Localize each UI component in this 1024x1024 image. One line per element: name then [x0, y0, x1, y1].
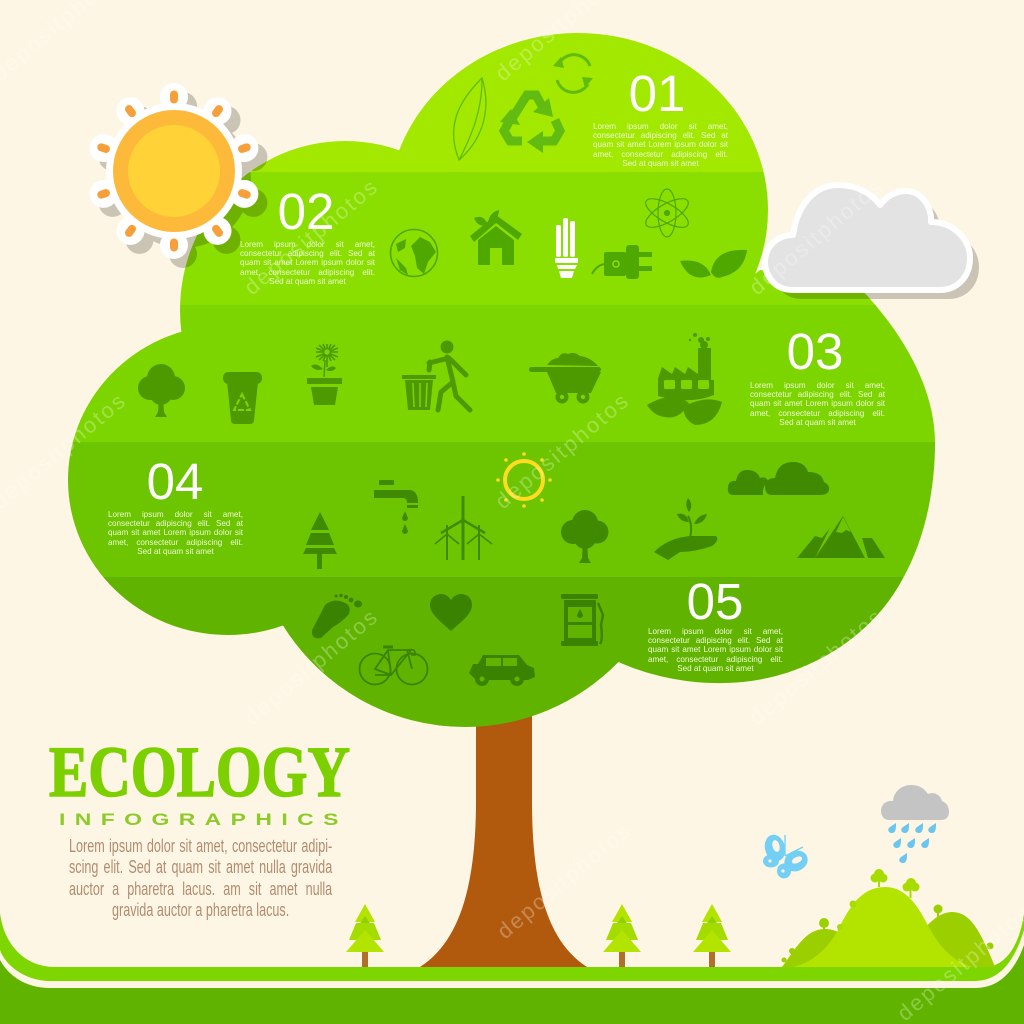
icon: eco house [470, 210, 522, 265]
icon: recycling bin [223, 372, 262, 424]
sun [90, 83, 258, 259]
hills with little trees [782, 869, 995, 967]
icon: bicycle [360, 647, 428, 684]
watermark overlay: depositphotos [239, 175, 382, 300]
intro paragraph [69, 836, 332, 920]
icon: atom [642, 189, 692, 237]
icon: tree [138, 364, 185, 417]
text block 02: Sed at quam sit amet [269, 277, 346, 286]
icon: mountains [797, 516, 885, 558]
text block 03: quam sit amet Lorem ipsum dolor sit [750, 399, 885, 408]
white cloud [765, 185, 970, 290]
text block 04: Lorem ipsum dolor sit amet, [108, 510, 243, 519]
text block 03: Sed at quam sit amet [779, 418, 856, 427]
text block 04: consectetur adipiscing elit. Sed at [108, 519, 243, 528]
subtitle: INFOGRAPHICS: INFOGRAPHICS [59, 811, 338, 829]
small pine tree right [693, 904, 731, 967]
watermark overlay: depositphotos [492, 819, 635, 944]
icon: leaf outline [454, 78, 486, 160]
rain cloud with drops [881, 785, 949, 863]
icon: wheelbarrow with load [529, 353, 601, 404]
text block 05: quam sit amet Lorem ipsum dolor sit [648, 645, 783, 654]
icon: plug [592, 245, 652, 279]
text block 02 [240, 240, 375, 286]
icon: globe [390, 230, 438, 276]
intro paragraph: scing elit. Sed at quam sit amet nulla gravida [69, 857, 332, 877]
text block 04: Sed at quam sit amet [137, 547, 214, 556]
sun shadow [99, 92, 267, 268]
text block 03: amet, consectetur adipiscing elit. [750, 409, 885, 418]
icon: footprint [312, 594, 362, 638]
icon: fuel pump [561, 594, 603, 646]
icon: wind turbines [435, 496, 492, 560]
icon: refresh arrows [553, 55, 593, 92]
text block 04 [108, 510, 243, 556]
ground: dark green base [0, 945, 1024, 1024]
text block 04: quam sit amet Lorem ipsum dolor sit [108, 528, 243, 537]
icon: hand holding plant [654, 498, 717, 560]
small pine tree left [346, 904, 384, 967]
icon: person using trash bin [402, 340, 470, 410]
icon: car [469, 655, 535, 686]
text block 01: Lorem ipsum dolor sit amet, [593, 122, 728, 131]
text block 05: amet, consectetur adipiscing elit. [648, 655, 783, 664]
number 04: 04 [147, 453, 203, 510]
intro paragraph: auctor a pharetra lacus. am sit amet nulla [69, 879, 332, 899]
ground: bright curved band [0, 913, 1024, 981]
text block 01: Sed at quam sit amet [622, 159, 699, 168]
watermark overlay: depositphotos [744, 605, 887, 730]
text block 03 [750, 381, 885, 427]
text block 02: quam sit amet Lorem ipsum dolor sit [240, 258, 375, 267]
icon: two clouds [728, 462, 829, 495]
text block 02: amet, consectetur adipiscing elit. [240, 268, 375, 277]
text block 01: amet, consectetur adipiscing elit. [593, 150, 728, 159]
icon: potted flower [307, 344, 342, 405]
cloud shadow [774, 194, 979, 299]
text block 05 [648, 627, 783, 673]
icon: yellow sun ring [496, 452, 552, 508]
icon: recycle symbol [500, 95, 560, 153]
small pine tree centre [603, 904, 641, 967]
number 03: 03 [787, 323, 843, 380]
intro paragraph: gravida auctor a pharetra lacus. [112, 900, 289, 920]
butterfly [762, 832, 811, 878]
text block 01: quam sit amet Lorem ipsum dolor sit [593, 140, 728, 149]
icon: CFL bulb [555, 218, 578, 278]
icon: twin leaves [680, 250, 747, 278]
text block 05: consectetur adipiscing elit. Sed at [648, 636, 783, 645]
text block 03: Lorem ipsum dolor sit amet, [750, 381, 885, 390]
text block 01 [593, 122, 728, 168]
icon: heart [430, 594, 472, 631]
tree canopy with five bands [68, 33, 935, 727]
icon: round tree [561, 510, 608, 563]
text block 01: consectetur adipiscing elit. Sed at [593, 131, 728, 140]
title: ECOLOGY: ECOLOGY [49, 732, 350, 812]
icon: water tap [374, 480, 418, 534]
text block 04: amet, consectetur adipiscing elit. [108, 538, 243, 547]
watermark overlay: depositphotos [239, 605, 382, 730]
tree trunk [420, 715, 587, 967]
text block 05: Sed at quam sit amet [677, 664, 754, 673]
number 02: 02 [278, 183, 334, 240]
watermark overlay: depositphotos [744, 175, 887, 300]
text block 02: consectetur adipiscing elit. Sed at [240, 249, 375, 258]
number 05: 05 [687, 573, 743, 630]
intro paragraph: Lorem ipsum dolor sit amet, consectetur adipi- [69, 836, 332, 856]
icon: pine tree [303, 512, 337, 569]
text block 03: consectetur adipiscing elit. Sed at [750, 390, 885, 399]
watermark overlay: depositphotos [490, 389, 633, 514]
text block 05: Lorem ipsum dolor sit amet, [648, 627, 783, 636]
text block 02: Lorem ipsum dolor sit amet, [240, 240, 375, 249]
icon: factory on leaves [647, 333, 722, 425]
number 01: 01 [629, 65, 685, 122]
